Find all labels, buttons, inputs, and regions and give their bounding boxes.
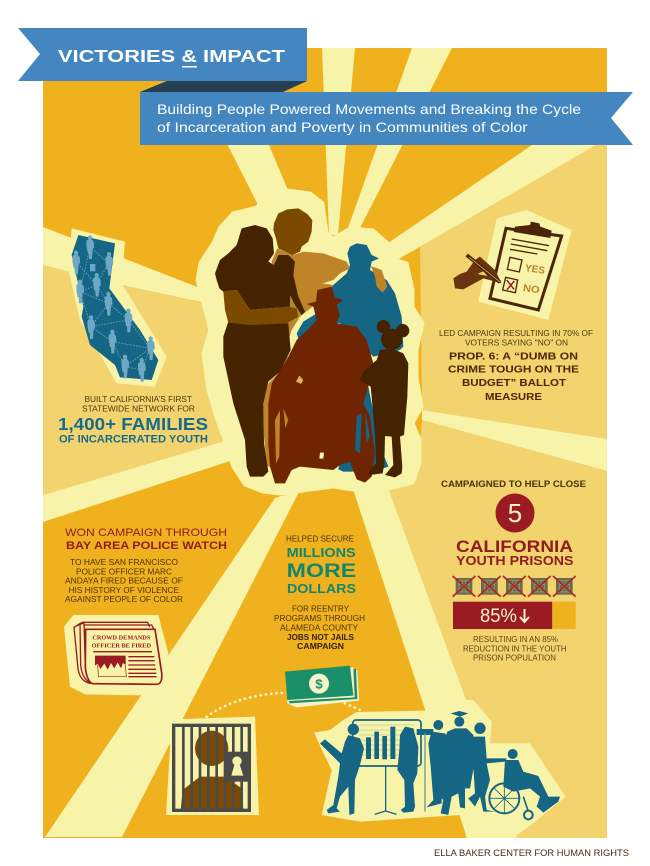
person: blue figure in cap	[297, 243, 403, 472]
text: police watch: POLICE OFFICER MARC	[76, 566, 172, 576]
text: prison reduction: PRISON POPULATION	[473, 654, 556, 663]
text: millions more dollars: MILLIONS	[287, 546, 356, 560]
text: police watch: HIS HISTORY OF VIOLENCE	[68, 585, 179, 595]
text: millions more dollars: ALAMEDA COUNTY	[280, 623, 358, 633]
dotted connector arc	[207, 693, 362, 717]
badge: number 5	[496, 494, 534, 532]
text: millions more dollars	[274, 534, 365, 651]
background panel	[43, 48, 607, 838]
text: Prop 6: LED CAMPAIGN RESULTING IN 70% OF	[439, 328, 593, 338]
text: millions more dollars: MORE	[287, 560, 356, 582]
icon: money stack: $	[315, 676, 323, 691]
text: California families: STATEWIDE NETWORK FOR	[82, 404, 195, 414]
heading: California youth prisons	[456, 538, 574, 568]
text: California families	[58, 394, 208, 446]
text: campaigned to close: CAMPAIGNED TO HELP CLOSE	[441, 479, 586, 489]
title text: VICTORIES & IMPACT	[58, 46, 285, 66]
text: police watch: WON CAMPAIGN THROUGH	[65, 527, 227, 539]
icon: newspaper: CROWD DEMANDS	[92, 636, 151, 642]
text: millions more dollars: FOR REENTRY	[292, 604, 349, 614]
text: Prop 6: MEASURE	[485, 391, 542, 403]
footer credit: ELLA BAKER CENTER FOR HUMAN RIGHTS	[434, 848, 629, 858]
heading: California youth prisons: YOUTH PRISONS	[456, 553, 574, 568]
icon: money stack	[285, 666, 359, 707]
text: police watch: ANDAYA FIRED BECAUSE OF	[65, 576, 183, 586]
badge: number 5: 5	[508, 498, 522, 528]
text: California families: OF INCARCERATED YOUTH	[59, 434, 208, 446]
text: police watch: BAY AREA POLICE WATCH	[66, 540, 227, 552]
text: Prop 6: PROP. 6: A “DUMB ON	[449, 350, 578, 362]
progress bar: 85 percent: 85%	[480, 606, 517, 627]
text: millions more dollars: DOLLARS	[287, 582, 356, 596]
person: back figure in tan shirt	[263, 208, 387, 467]
progress bar: 85 percent	[453, 602, 576, 629]
person: child with hair buns	[360, 320, 409, 477]
banner: subtitle: Building People Powered Movements and Breaking the Cycle	[157, 101, 581, 117]
text: police watch: TO HAVE SAN FRANCISCO	[70, 557, 178, 567]
icon: jail cell	[166, 717, 259, 815]
family silhouettes	[215, 208, 409, 483]
text: police watch: AGAINST PEOPLE OF COLOR	[65, 594, 183, 604]
graduate	[437, 711, 475, 815]
text: California families: 1,400+ FAMILIES	[58, 414, 208, 434]
presentation board	[353, 720, 421, 814]
text: Prop 6: BUDGET” BALLOT	[462, 377, 567, 389]
text: prison reduction	[463, 635, 566, 663]
banner: title	[18, 28, 307, 92]
text: millions more dollars: JOBS NOT JAILS	[287, 632, 354, 642]
text: millions more dollars: PROGRAMS THROUGH	[274, 613, 365, 623]
text: Prop 6: VOTERS SAYING "NO" ON	[465, 338, 568, 348]
center halo behind family	[197, 190, 423, 494]
text: millions more dollars: CAMPAIGN	[297, 641, 344, 651]
text: prison reduction: RESULTING IN AN 85%	[473, 635, 558, 644]
text: Prop 6: CRIME TOUGH ON THE	[448, 364, 579, 376]
icon: clipboard ballot	[453, 210, 572, 320]
text: prison reduction: REDUCTION IN THE YOUTH	[463, 644, 566, 653]
icon: clipboard ballot: NO	[522, 283, 541, 296]
icons: crossed out prisons	[453, 576, 576, 597]
icon: California network map	[68, 228, 167, 387]
wheelchair user	[489, 749, 560, 819]
icon: newspaper	[64, 615, 168, 695]
presenter	[320, 724, 364, 815]
icon: clipboard ballot: YES	[524, 263, 546, 277]
man with camera	[417, 720, 450, 812]
person: woman holding child	[215, 225, 305, 477]
icon: group of people	[320, 711, 560, 819]
banner: subtitle	[140, 92, 633, 145]
halo behind group of people	[314, 700, 566, 838]
banner: subtitle: of Incarceration and Poverty in Communities of Color	[157, 119, 528, 135]
woman	[397, 727, 418, 813]
icon: newspaper: OFFICER BE FIRED	[92, 643, 152, 649]
text: Prop 6	[439, 328, 593, 403]
text: millions more dollars: HELPED SECURE	[286, 534, 354, 544]
title underline	[182, 66, 197, 68]
text: California families: BUILT CALIFORNIA’S FIRST	[84, 394, 193, 404]
person: man in wheelchair	[268, 287, 375, 483]
text: police watch	[65, 527, 227, 604]
heading: California youth prisons: CALIFORNIA	[456, 538, 573, 556]
nurse	[468, 723, 507, 812]
